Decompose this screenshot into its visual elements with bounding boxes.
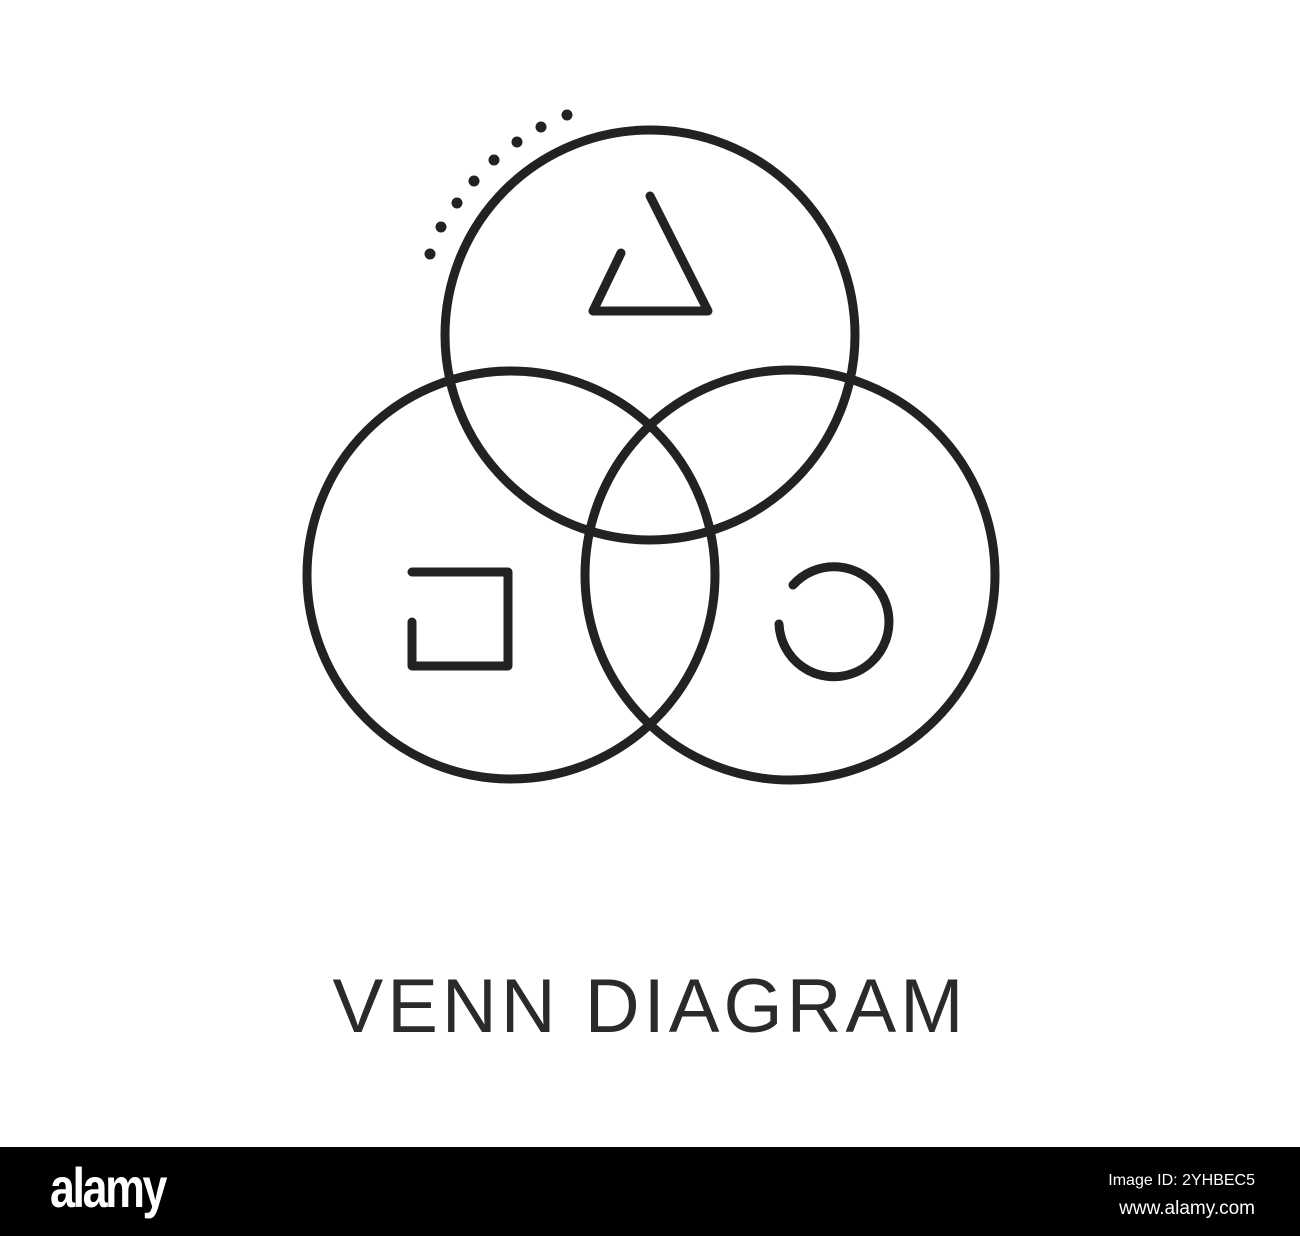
icon: circle arc xyxy=(779,567,889,677)
circle: top xyxy=(445,130,855,540)
dotted arc xyxy=(424,110,572,260)
image id: www.alamy.com xyxy=(1119,1198,1255,1219)
image id: Image ID: 2YHBEC5 xyxy=(1108,1172,1255,1189)
image id xyxy=(1108,1172,1255,1219)
footer bar xyxy=(0,1147,1300,1236)
icon: triangle xyxy=(593,196,708,311)
circle: right xyxy=(585,370,995,780)
title: VENN DIAGRAM xyxy=(333,964,967,1049)
icon: square xyxy=(412,572,508,666)
logo: alamy xyxy=(50,1156,165,1219)
circle: left xyxy=(307,371,715,779)
